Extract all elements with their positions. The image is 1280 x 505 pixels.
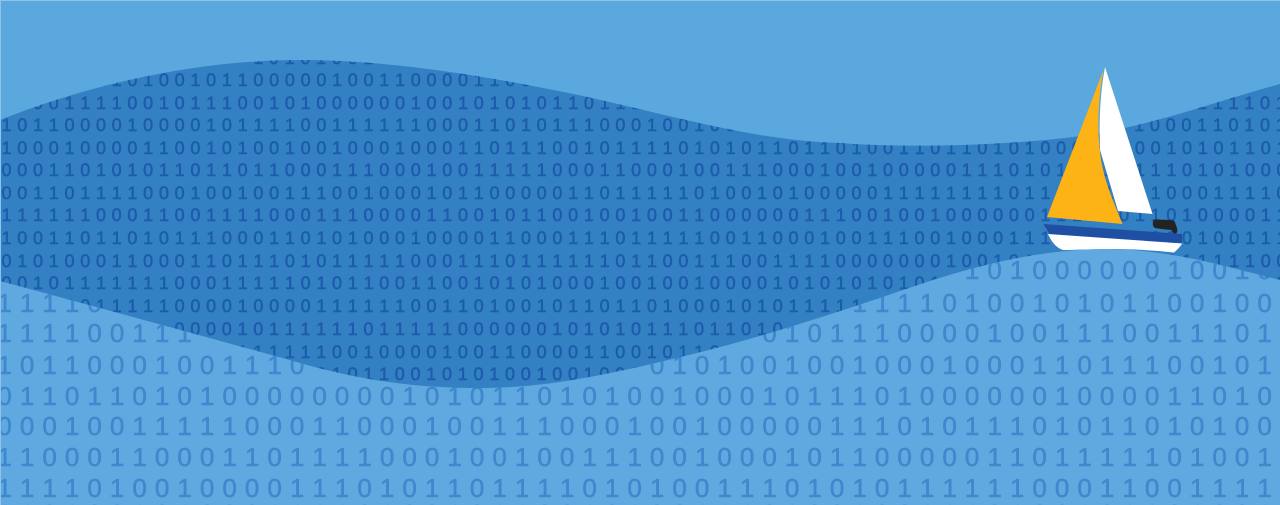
sailboat — [1044, 67, 1182, 252]
binary digits on front wave — [0, 255, 1280, 505]
blue hull stripe — [1044, 224, 1182, 243]
binary digits on back wave: 0010111111100011111010110011001010100010010010000101010101010100010100101010010100 — [2, 273, 1280, 293]
white hull — [1048, 234, 1182, 252]
binary digits on back wave: 0101000110001101110101111100011101111110110011100111100000001001010110100101111100 — [2, 251, 1280, 271]
yellow jib sail — [1047, 70, 1122, 224]
binary digits on back wave: 01011011010010110000010011000011001 — [2, 70, 552, 90]
binary digits on back wave: 101100001000010111100111111000110101110001001001010 — [2, 115, 804, 135]
binary digits on back wave: 1111110010000100110000110010110 — [238, 342, 725, 362]
binary digits on back wave: 000010111111011111000000101010111011010 — [174, 319, 788, 339]
binary digits on front wave: 1111010010101100100 — [852, 288, 1280, 318]
binary digits on back wave: 0001101010110110110001110001001111100011000100111000100100000111010111111110101000 — [2, 160, 1280, 180]
binary digits on front wave: 0110110101000000001010110101001000101110100000010000110101 — [0, 381, 1280, 411]
binary digits on front wave: 0001001111100011000100111000100100000111010111010110101001 — [0, 411, 1280, 441]
white mainsail — [1100, 67, 1152, 214]
binary digits on front wave: 01011100001001110011101 — [762, 318, 1280, 348]
binary digits on front wave: 10110001001110 — [0, 350, 312, 380]
binary digits on back wave: 1001101101011100011010100010000110001110111110011000100111001000111101101000100111 — [2, 228, 1280, 248]
binary digits on front wave: 111100 — [0, 288, 132, 318]
binary digits on back wave: 10101001 — [253, 48, 379, 68]
binary digits on front wave: 1111010010000111010110111101010011101010111111000110011110 — [0, 473, 1280, 503]
binary digits on back wave: 1111110001100111100011100001100101100100100110000001110010010000001110101101000011 — [2, 205, 1280, 225]
binary digits on back wave: 00001111001011100101000000100101010110111 — [2, 93, 647, 113]
binary digits on back wave — [2, 48, 1280, 384]
binary digits on back wave: 0000101111100001000011111100110100101101101000101011111 — [2, 296, 867, 316]
black cabin window — [1153, 220, 1177, 234]
binary digits on front wave: 0101001001000100011011100101 — [650, 350, 1280, 380]
binary digits on front wave: 10100000010010 — [965, 255, 1280, 285]
binary digits on front wave: 1100011000110111100010010011100100010110000011011111010010 — [0, 442, 1280, 472]
front light wave — [0, 249, 1280, 505]
binary digits on front wave: 111100111 — [0, 318, 200, 348]
binary digits on back wave: 0011011110001001001110010001011000001101111101001010000011111111011110101100011110 — [2, 183, 1280, 203]
binary digits on back wave: 010110010101001001000 — [316, 364, 647, 384]
binary digits on back wave: 1000100001100101001001000100011011100101111010101101101001101101010000000010101101 — [2, 138, 1280, 158]
